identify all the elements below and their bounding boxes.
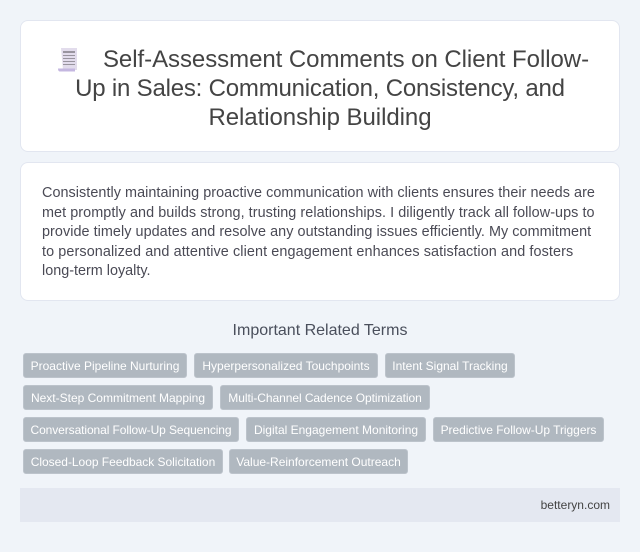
tag (23, 385, 213, 410)
tag: Multi-Channel Cadence Optimization (228, 391, 422, 405)
text block: comment: long-term loyalty. (42, 263, 150, 279)
tag: Next-Step Commitment Mapping (31, 391, 205, 405)
tags list (23, 353, 604, 474)
title: Up in Sales: Communication, Consistency, and (75, 75, 565, 102)
tag (23, 449, 223, 474)
title: Relationship Building (208, 104, 432, 131)
text block: comment: to personalized and attentive client engagement enhances satisfaction and fosters (42, 244, 573, 260)
text block: comment: met promptly and builds strong, trusting relationships. I diligently track all follow-ups to (42, 204, 595, 220)
tag: Closed-Loop Feedback Solicitation (31, 455, 215, 469)
text block: comment: Consistently maintaining proactive communication with clients ensures their needs are (42, 185, 595, 201)
text block: comment (42, 185, 595, 279)
tag: Predictive Follow-Up Triggers (441, 423, 596, 437)
tag (433, 417, 604, 442)
tag: Intent Signal Tracking (392, 359, 508, 373)
tag: Hyperpersonalized Touchpoints (202, 359, 370, 373)
text block: comment: provide timely updates and resolve any outstanding issues efficiently. My commitment (42, 224, 591, 240)
tag: Digital Engagement Monitoring (254, 423, 418, 437)
tag: Value-Reinforcement Outreach (236, 455, 401, 469)
tag (229, 449, 408, 474)
title (75, 46, 589, 131)
tag (220, 385, 430, 410)
tag: Proactive Pipeline Nurturing (31, 359, 179, 373)
panel: title card (20, 20, 620, 152)
footer: source: betteryn.com (541, 498, 610, 512)
title: Self-Assessment Comments on Client Follow- (103, 46, 589, 73)
panel: self-assessment text (20, 162, 620, 301)
tag (246, 417, 426, 442)
tag (23, 353, 187, 378)
icon: document scroll (58, 48, 77, 72)
tag (194, 353, 378, 378)
footer bar (20, 488, 620, 522)
tag (23, 417, 239, 442)
heading: important related terms: Important Related Terms (233, 322, 407, 339)
tag (385, 353, 515, 378)
tag: Conversational Follow-Up Sequencing (31, 423, 231, 437)
